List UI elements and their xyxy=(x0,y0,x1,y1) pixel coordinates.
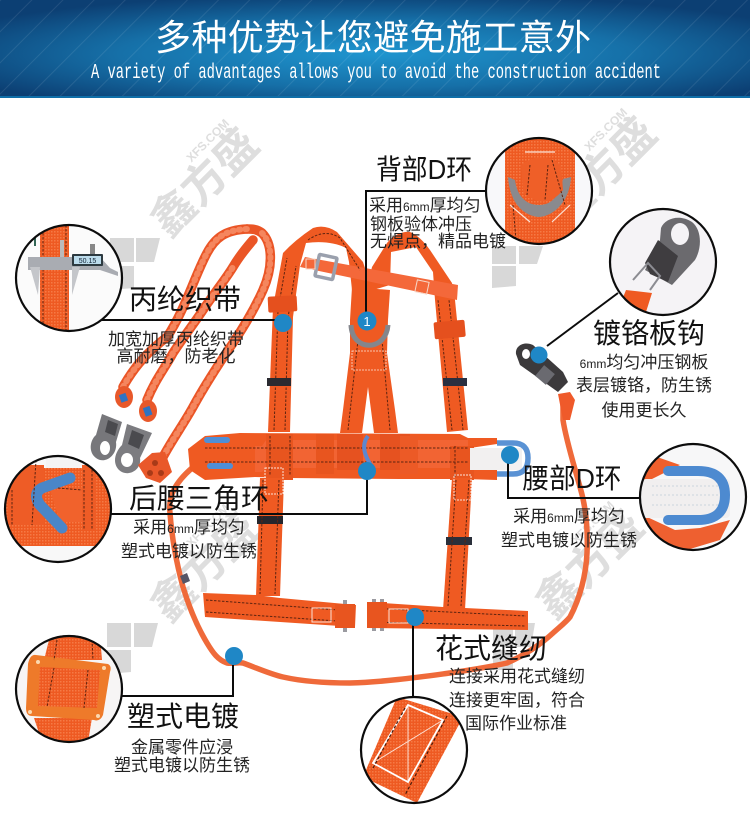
watermarks: 鑫方盛 xyxy=(141,119,268,246)
detail circle: snap hook xyxy=(610,209,716,315)
waist D ring xyxy=(470,443,528,474)
watermarks: XFS.COM xyxy=(569,498,617,547)
detail circle: caliper webbing: 50.15 xyxy=(79,258,96,265)
back D ring xyxy=(351,325,388,345)
detail circle: stitching xyxy=(361,697,467,803)
header banner xyxy=(0,0,750,98)
text: back D ring: 背部D环 xyxy=(376,154,472,185)
text: chrome hook: 使用更长久 xyxy=(602,400,686,420)
icon: lanyard snap hook xyxy=(516,343,575,420)
slider left xyxy=(268,295,297,313)
leg buckles xyxy=(343,600,347,632)
lanyard strap xyxy=(170,395,587,683)
rope lanyard xyxy=(123,229,270,457)
text: waist D ring: 采用6mm厚均匀 xyxy=(513,507,625,526)
text: back D ring xyxy=(369,154,506,251)
text: back D ring: 采用6mm厚均匀 xyxy=(369,196,481,215)
text: chrome hook: 表层镀铬，防生锈 xyxy=(576,376,712,395)
detail circle: rectangular buckle xyxy=(16,636,122,742)
text: plastic coating: 塑式电镀以防生锈 xyxy=(114,756,250,775)
callout dots xyxy=(225,312,548,665)
harness lower straps xyxy=(203,468,528,632)
detail circle: triangle ring xyxy=(5,456,111,562)
text: fancy stitching: 花式缝纫 xyxy=(435,633,547,664)
text: rear triangle ring: 塑式电镀以防生锈 xyxy=(121,542,257,561)
text: nylon webbing xyxy=(108,284,244,366)
callout dots: 1 xyxy=(363,314,371,329)
text: plastic coating: 金属零件应浸 xyxy=(131,738,233,757)
left blue rings xyxy=(204,437,230,443)
harness upper straps xyxy=(267,227,468,433)
center blue ring xyxy=(364,436,372,467)
text: chrome hook: 镀铬板钩 xyxy=(593,318,705,349)
watermarks: XFS.COM xyxy=(582,105,630,154)
icon: double snap hooks xyxy=(91,386,157,473)
text: fancy stitching: 连接更牢固，符合 xyxy=(449,691,585,710)
watermarks: 鑫方盛 xyxy=(539,108,666,235)
connector lines xyxy=(100,191,641,698)
watermarks: 鑫方盛 xyxy=(526,501,653,628)
text: rear triangle ring: 后腰三角环 xyxy=(129,483,269,514)
text: nylon webbing: 高耐磨，防老化 xyxy=(116,347,236,366)
watermarks xyxy=(107,101,666,674)
watermarks: XFS.COM xyxy=(184,116,232,165)
text: chrome hook xyxy=(576,318,712,420)
title: 多种优势让您避免施工意外 xyxy=(155,17,591,58)
text: back D ring: 无焊点，精品电镀 xyxy=(370,232,506,251)
watermarks: XFS.COM xyxy=(184,501,232,550)
text: fancy stitching: 连接采用花式缝纫 xyxy=(449,667,585,686)
text: rear triangle ring: 采用6mm厚均匀 xyxy=(133,518,245,537)
text: waist D ring xyxy=(501,463,637,550)
buckle xyxy=(315,254,337,280)
detail circle: caliper webbing xyxy=(16,225,122,331)
watermarks: 鑫方盛 xyxy=(141,504,268,631)
text: nylon webbing: 丙纶织带 xyxy=(129,284,241,315)
harness belt xyxy=(188,433,497,480)
text: nylon webbing: 加宽加厚丙纶织带 xyxy=(108,330,244,349)
text: fancy stitching: 国际作业标准 xyxy=(465,714,567,733)
keepers xyxy=(267,378,291,386)
text: chrome hook: 6mm均匀冲压钢板 xyxy=(580,353,708,372)
text: fancy stitching xyxy=(435,633,585,733)
text: rear triangle ring xyxy=(121,483,269,561)
text: plastic coating: 塑式电镀 xyxy=(127,701,239,732)
text: waist D ring: 腰部D环 xyxy=(522,463,622,494)
text: plastic coating xyxy=(114,701,250,775)
text: back D ring: 钢板验体冲压 xyxy=(370,215,472,234)
slider right xyxy=(433,320,466,339)
text: waist D ring: 塑式电镀以防生锈 xyxy=(501,531,637,550)
detail circle: back D ring xyxy=(486,138,592,244)
detail circle: waist D ring xyxy=(640,444,747,552)
icon: rope grip xyxy=(138,452,172,483)
